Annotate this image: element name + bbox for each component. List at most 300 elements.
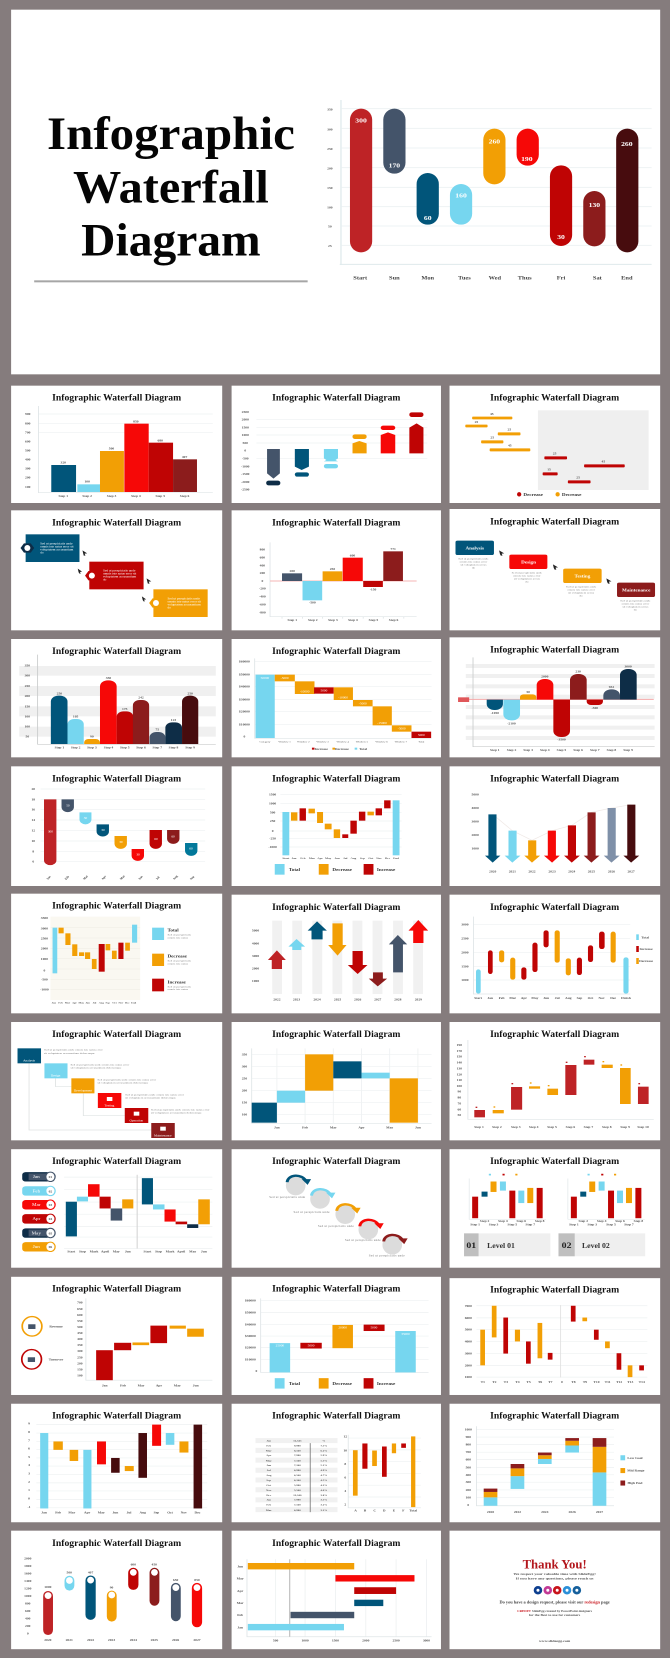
hero waterfall pill chart (327, 100, 652, 281)
thin bar waterfall: T2 (492, 1380, 497, 1384)
column chart: 300 (25, 467, 31, 471)
gantt style waterfall: 25 (475, 420, 479, 424)
legend (312, 747, 367, 751)
data table: 6,980 (294, 1469, 301, 1472)
twelve month chart: Jul (127, 1511, 132, 1514)
monthly waterfall chart: Mar (309, 856, 316, 860)
hero waterfall pill chart: 170 (389, 163, 401, 169)
legend items: omnis iste natus (168, 987, 189, 991)
shield waterfall chart: 18 (32, 798, 36, 801)
stair step 2: Sed ut perspiciatis unde omnis iste natus error (71, 1063, 129, 1066)
hero title: Infographic (47, 107, 295, 159)
ten step waterfall chart: 170 (457, 1049, 462, 1053)
twin waterfall chart: Step (155, 1250, 162, 1253)
stacked waterfall chart: 0 (467, 1503, 470, 1507)
diverging rounded bar chart: Step 3 (523, 748, 533, 752)
arrow column chart: 2021 (509, 870, 516, 873)
circular arrow 3 (318, 1204, 361, 1228)
arrow bar chart: -2000 (241, 480, 250, 484)
twelve month chart (28, 1422, 207, 1514)
rounded column chart: 105 (73, 715, 79, 718)
slide heading: Infographic Waterfall Diagram (490, 393, 620, 403)
waterfall chart: C (373, 1509, 377, 1512)
level 02 chart: Step 5 (606, 1223, 616, 1226)
shield waterfall chart: 6 (32, 860, 35, 864)
gantt style waterfall: 25 (508, 428, 512, 432)
rounded column chart: 123 (171, 718, 177, 722)
narrow waterfall chart: Mar (65, 1002, 71, 1004)
bar chart: 250 (330, 567, 336, 571)
gantt style waterfall (465, 410, 649, 490)
shield waterfall chart: 60 (154, 837, 158, 841)
twin waterfall chart: Start (67, 1250, 76, 1253)
slide heading: Infographic Waterfall Diagram (272, 1156, 401, 1167)
block waterfall chart (242, 1048, 432, 1130)
column chart: 850 (133, 420, 139, 423)
slide heading: Infographic Waterfall Diagram (272, 646, 401, 657)
descending waterfall chart: Window 5 (356, 741, 369, 743)
data table: Jul (267, 1469, 271, 1472)
data table: Oct (266, 1484, 271, 1487)
waterfall chart: Total (409, 1509, 417, 1512)
ten step waterfall chart: Step 2 (492, 1125, 502, 1129)
horizontal bar chart: 1500 (332, 1639, 339, 1642)
horizontal bar chart: 2500 (392, 1639, 400, 1642)
hero title: Diagram (81, 214, 261, 266)
level 01 chart: Step 7 (526, 1223, 535, 1226)
credit lines: for the Best to use for customers (529, 1613, 581, 1617)
column chart: Step 5 (155, 494, 165, 498)
arrow bar chart: 2000 (242, 418, 249, 422)
circular arrow 2 (294, 1189, 335, 1214)
waterfall chart: $30000 (245, 1334, 256, 1338)
callout 2 (85, 562, 144, 589)
arrow bar chart: -2500 (241, 488, 250, 492)
bar chart: Step 2 (308, 618, 318, 622)
gantt style waterfall: 25 (576, 476, 580, 480)
bar chart: Step 4 (348, 618, 358, 622)
data table: 7,340 (294, 1464, 301, 1467)
narrow waterfall chart: 2000 (41, 947, 48, 951)
lollipop pill chart: 407 (88, 1571, 94, 1574)
level 02 chart (568, 1174, 645, 1226)
hero waterfall pill chart: Mon (421, 276, 435, 281)
credit lines (517, 1610, 593, 1617)
hero waterfall pill chart: 100 (327, 206, 333, 209)
column chart: Step 3 (107, 494, 117, 498)
waterfall chart: 450 (77, 1331, 83, 1335)
panel: rounded columns with bands (11, 639, 222, 757)
waterfall chart: Feb (120, 1384, 126, 1387)
thin bar waterfall: T10 (593, 1380, 600, 1384)
monthly waterfall chart: Start (282, 856, 289, 860)
horizontal bar chart: Jun (237, 1565, 243, 1568)
twelve month chart: Apr (84, 1511, 91, 1514)
waterfall chart: A (354, 1509, 358, 1512)
monthly waterfall chart: Dec (385, 856, 391, 860)
data table: Mar (266, 1450, 272, 1452)
data table: Mar (266, 1509, 272, 1512)
month tabs: Mar (32, 1203, 41, 1207)
thank you message: We respect your valuable time with SlideEgg! (513, 1572, 596, 1576)
month tabs: 03 (49, 1203, 53, 1207)
rounded column chart: 350 (25, 664, 30, 668)
legend: Increase (377, 868, 395, 872)
stacked waterfall chart: 200 (466, 1488, 471, 1492)
level 02 card (558, 1233, 645, 1256)
bar chart: 771 (390, 547, 396, 551)
shield waterfall chart: 14 (32, 818, 36, 822)
monthly waterfall chart: Apr (317, 856, 324, 860)
waterfall chart: 5000 (370, 1326, 378, 1330)
slide heading: Infographic Waterfall Diagram (52, 646, 182, 657)
rounded column chart (19, 655, 216, 750)
narrow waterfall chart: Aug (99, 1002, 105, 1004)
descending waterfall chart: 5000 (320, 689, 328, 692)
descending waterfall chart: Window 6 (375, 741, 388, 743)
ten step waterfall chart: Step 6 (566, 1125, 576, 1129)
waterfall chart: 0 (255, 1369, 258, 1373)
level 01 card: Level 01 (487, 1241, 515, 1250)
data table: 5,560 (294, 1489, 301, 1492)
twelve month chart: 6 (28, 1447, 30, 1450)
descending waterfall chart: -5000 (281, 676, 289, 680)
step: maintenance (617, 583, 655, 612)
stair step 3: Sed ut perspiciatis unde omnis iste natus error (97, 1078, 156, 1081)
narrow waterfall chart: -1000 (40, 988, 49, 991)
horizontal bar chart: 1000 (301, 1639, 309, 1642)
twin waterfall chart: May (189, 1250, 197, 1253)
panel: column waterfall steps (11, 386, 222, 503)
waterfall chart: 350 (77, 1344, 83, 1347)
descending waterfall chart: $60000 (239, 660, 250, 664)
narrow waterfall chart: Dec (125, 1002, 131, 1004)
lollipop pill chart: 600 (25, 1609, 31, 1613)
bar chart: 800 (260, 548, 265, 552)
twin waterfall chart: Jun (125, 1250, 131, 1253)
stair step 4: sit voluptatem accusantium doloremque (125, 1096, 177, 1100)
icon: turnover ring (22, 1350, 64, 1369)
column chart: 900 (25, 412, 31, 416)
column chart: 407 (182, 455, 188, 459)
monthly waterfall chart: 500 (270, 811, 276, 814)
step: design: Design (521, 560, 536, 565)
icon: revenue ring (22, 1317, 63, 1336)
shield waterfall chart: May (119, 874, 126, 880)
thin bar waterfall: T7 (548, 1380, 553, 1384)
block arrow chart: 2027 (374, 998, 382, 1001)
level 01 chart: Step 3 (489, 1223, 499, 1226)
gantt style waterfall: 25 (553, 452, 557, 456)
twelve month chart: Dec (195, 1511, 201, 1514)
narrow waterfall chart: 3000 (41, 927, 48, 930)
block waterfall chart: 300 (242, 1065, 248, 1069)
ten step waterfall chart (457, 1040, 654, 1129)
data table: May (266, 1460, 272, 1462)
column chart: Step 1 (58, 494, 68, 498)
shield waterfall chart: Jun (137, 875, 144, 880)
stair step 5: Sed ut perspiciatis unde omnis iste natus error (151, 1108, 210, 1111)
step: testing (563, 569, 602, 598)
panel: positive and negative waterfall (232, 510, 441, 630)
data table: % (322, 1440, 326, 1442)
lollipop pill chart: 2000 (24, 1557, 32, 1561)
callout 3: do (168, 606, 171, 609)
narrow waterfall chart: Jan (52, 1002, 57, 1004)
pill waterfall chart: Sep (577, 996, 582, 1000)
descending waterfall chart: -15000 (377, 721, 387, 725)
legend: Total (359, 747, 367, 751)
panel: arrow bars waterfall (232, 386, 441, 503)
descending waterfall chart: $50000 (239, 673, 250, 676)
hero waterfall pill chart: 260 (621, 142, 633, 148)
column chart: 800 (25, 422, 31, 425)
block waterfall chart: 250 (242, 1077, 248, 1081)
twin waterfall chart: Start (144, 1250, 152, 1253)
legend: Increase (377, 1381, 395, 1386)
diverging rounded bar chart: 50 (526, 690, 530, 694)
arrow column chart: 2023 (548, 870, 556, 873)
lollipop pill chart: 90 (110, 1586, 114, 1589)
narrow waterfall chart (40, 916, 140, 1004)
hero waterfall pill chart: 130 (589, 203, 601, 209)
level 01 chart (469, 1174, 546, 1226)
level 01 chart: Step 1 (470, 1223, 480, 1226)
arrow column chart: 2022 (528, 870, 536, 873)
thin bar waterfall: T1 (481, 1380, 485, 1384)
block arrow chart: 2025 (334, 998, 342, 1001)
twelve month chart: Mar (68, 1511, 76, 1514)
legend: Decrease (332, 868, 352, 872)
data table: 3.2% (321, 1504, 328, 1507)
arrow bar chart: -1500 (241, 472, 250, 476)
thank you message (513, 1572, 596, 1580)
descending waterfall chart: Window 1 (278, 741, 292, 743)
bar chart: Step 5 (369, 618, 379, 622)
ten step waterfall chart: 50 (458, 1113, 462, 1117)
bar chart: Step 6 (389, 618, 399, 622)
rounded column chart: Step 5 (120, 746, 130, 750)
slide heading: Infographic Waterfall Diagram (490, 774, 620, 784)
lollipop pill chart: 600 (131, 1563, 136, 1567)
data table: Jan (266, 1440, 272, 1442)
twin waterfall chart: Mark (166, 1250, 175, 1253)
step: analysis: do (472, 566, 476, 569)
data table: Jun (266, 1464, 272, 1467)
slide heading: Infographic Waterfall Diagram (490, 645, 620, 655)
pill waterfall chart: 1000 (461, 978, 469, 982)
thank you message: If you have any questions, please reach us (516, 1577, 594, 1580)
arrow column chart: 2024 (568, 870, 576, 873)
panel: rounded bars either side of zero (450, 637, 660, 757)
block waterfall chart: May (386, 1126, 394, 1130)
stacked waterfall chart: 900 (466, 1435, 471, 1439)
diverging rounded bar chart: 230 (575, 670, 581, 674)
monthly waterfall chart: Aug (351, 856, 357, 860)
twelve month chart: -1 (28, 1505, 31, 1509)
hero waterfall pill chart: 30 (557, 235, 565, 241)
ten step waterfall chart: Step 8 (602, 1125, 612, 1129)
block waterfall chart: Mar (330, 1126, 337, 1130)
panel: data table with waterfall (232, 1404, 441, 1522)
diverging rounded bar chart: -2100 (507, 722, 516, 725)
block waterfall chart: 200 (242, 1089, 248, 1093)
legend (517, 492, 581, 497)
rounded column chart: 75 (155, 728, 159, 732)
stacked waterfall chart: 600 (466, 1458, 471, 1462)
thin bar waterfall: 3000 (465, 1352, 472, 1355)
step: design (509, 555, 547, 584)
pill waterfall chart: 1500 (461, 965, 469, 968)
stacked waterfall chart: 400 (466, 1473, 471, 1477)
pill waterfall chart: Feb (499, 996, 505, 1000)
legend (275, 864, 395, 875)
hero waterfall pill chart: 25 (328, 244, 332, 248)
column chart (25, 406, 213, 498)
month tabs (22, 1172, 55, 1252)
column chart: 200 (25, 476, 31, 480)
lollipop pill chart: 2023 (108, 1638, 116, 1642)
descending waterfall chart: -5000 (398, 727, 406, 731)
thin bar waterfall: T6 (538, 1380, 543, 1384)
data table: 7,980 (294, 1499, 301, 1502)
rounded column chart: Step 6 (136, 746, 146, 750)
stacked waterfall chart: 2022 (514, 1510, 521, 1514)
monthly waterfall chart: -250 (269, 837, 276, 841)
block waterfall chart: Jan (274, 1126, 280, 1130)
waterfall chart: Jun (193, 1384, 199, 1387)
thin bar waterfall: T11 (605, 1380, 611, 1384)
step: maintenance: Maintenance (622, 588, 650, 593)
rounded column chart: Step 4 (104, 746, 114, 750)
slide heading: Infographic Waterfall Diagram (52, 1156, 182, 1167)
circular arrow 1 (269, 1176, 311, 1199)
pill waterfall chart: 2500 (461, 937, 469, 940)
panel: circular arrows staircase (232, 1149, 441, 1268)
data table: 6,340 (294, 1479, 301, 1482)
lollipop pill chart: 2027 (193, 1638, 201, 1642)
shield waterfall chart: 16 (32, 808, 36, 812)
column chart: 700 (25, 431, 31, 434)
step: testing: Testing (575, 574, 591, 579)
level 02 chart: Step 7 (624, 1223, 634, 1226)
monthly waterfall chart: Jul (343, 856, 348, 860)
bar chart: 200 (260, 571, 265, 575)
diverging rounded bar chart: Step 2 (507, 748, 517, 752)
panel: ten step waterfall (450, 1022, 660, 1140)
gantt style waterfall: 45 (508, 444, 512, 448)
data table: 6,980 (294, 1509, 301, 1512)
waterfall chart: 10 (343, 1449, 347, 1452)
rounded column chart: Step 2 (71, 746, 81, 750)
legend: Decrease (523, 493, 543, 497)
stacked waterfall chart: 500 (466, 1466, 471, 1469)
shield waterfall chart: 30 (84, 816, 88, 820)
level 01 chart: Step 2 (480, 1219, 490, 1223)
thin bar waterfall: 1000 (465, 1376, 472, 1379)
level 02 chart: Step 6 (615, 1219, 625, 1223)
horizontal bar chart: Apr (237, 1589, 244, 1593)
diverging rounded bar chart: Step 6 (573, 748, 583, 752)
ten step waterfall chart: 70 (458, 1102, 462, 1105)
level 02 chart: Step 2 (578, 1219, 588, 1223)
hero waterfall pill chart: 60 (424, 216, 432, 222)
level 01 chart: Step 5 (508, 1223, 518, 1226)
pill waterfall chart: Jan (487, 996, 493, 1000)
waterfall chart (77, 1298, 212, 1387)
arrow column chart: 2025 (588, 870, 595, 873)
stair step 3 (71, 1078, 156, 1093)
pill waterfall chart: Mar (509, 996, 517, 1000)
pill waterfall chart: Nov (599, 996, 605, 1000)
panel: stacked yearly waterfall (450, 1404, 660, 1522)
bar chart: Step 3 (328, 618, 338, 622)
waterfall chart: F (402, 1509, 404, 1512)
hero waterfall pill chart: Tues (458, 276, 472, 281)
arrow column chart: 2027 (627, 870, 635, 873)
shield waterfall chart: Jan (45, 875, 52, 880)
block arrow chart (252, 920, 428, 1001)
panel: horizontal waterfall bars (232, 1531, 441, 1649)
waterfall chart: May (174, 1384, 181, 1387)
shield waterfall chart: Mar (82, 874, 90, 880)
legend (620, 1455, 645, 1486)
slide heading: Infographic Waterfall Diagram (52, 1538, 182, 1548)
thin bar waterfall: 4000 (465, 1340, 472, 1343)
column chart: 500 (25, 449, 31, 453)
narrow waterfall chart: Sep (106, 1002, 111, 1004)
monthly waterfall chart: 1500 (269, 793, 277, 797)
waterfall chart: 150 (77, 1368, 83, 1371)
gantt style waterfall: 45 (602, 460, 606, 464)
hero waterfall pill chart: 200 (327, 167, 333, 170)
bar chart: -200 (259, 587, 266, 591)
circular arrow 3: Sed ut perspiciatis unde (318, 1224, 355, 1228)
descending waterfall chart: Window 2 (297, 741, 310, 743)
column chart: Step 4 (131, 494, 141, 498)
hero waterfall pill chart: 190 (521, 157, 533, 163)
arrow bar chart (241, 410, 427, 492)
pill waterfall chart: Apr (521, 996, 528, 1000)
shield waterfall chart: Feb (63, 875, 70, 880)
horizontal bar chart (237, 1559, 432, 1642)
legend: Increase (640, 947, 653, 951)
monthly waterfall chart: -1000 (268, 845, 277, 849)
panel: down arrows by year (450, 766, 660, 886)
waterfall chart: 35000 (401, 1332, 410, 1336)
slide heading: Infographic Waterfall Diagram (52, 1411, 182, 1421)
bar chart: -800 (259, 611, 266, 614)
thin bar waterfall: 6000 (465, 1316, 472, 1320)
arrow column chart: 2020 (489, 870, 497, 873)
hero waterfall pill chart: 300 (327, 128, 333, 131)
block arrow chart: 3000 (252, 954, 260, 958)
pill waterfall chart: May (531, 996, 539, 1000)
data table: Sep (266, 1479, 272, 1482)
legend items: Sed ut perspiciatis (168, 959, 192, 963)
stacked waterfall chart: 100 (466, 1496, 471, 1499)
pill waterfall chart: 3000 (461, 923, 469, 927)
legend: Decrease (335, 747, 349, 751)
level 02 chart: Step 4 (597, 1219, 607, 1223)
slide heading: Infographic Waterfall Diagram (490, 1285, 620, 1295)
month tabs: 06 (49, 1246, 53, 1249)
horizontal bar chart: 2000 (362, 1639, 370, 1642)
level 02 card: Level 02 (582, 1241, 610, 1250)
panel: lollipop pill waterfall (11, 1531, 222, 1649)
lollipop pill chart: 2025 (151, 1638, 158, 1642)
legend (275, 1378, 395, 1389)
